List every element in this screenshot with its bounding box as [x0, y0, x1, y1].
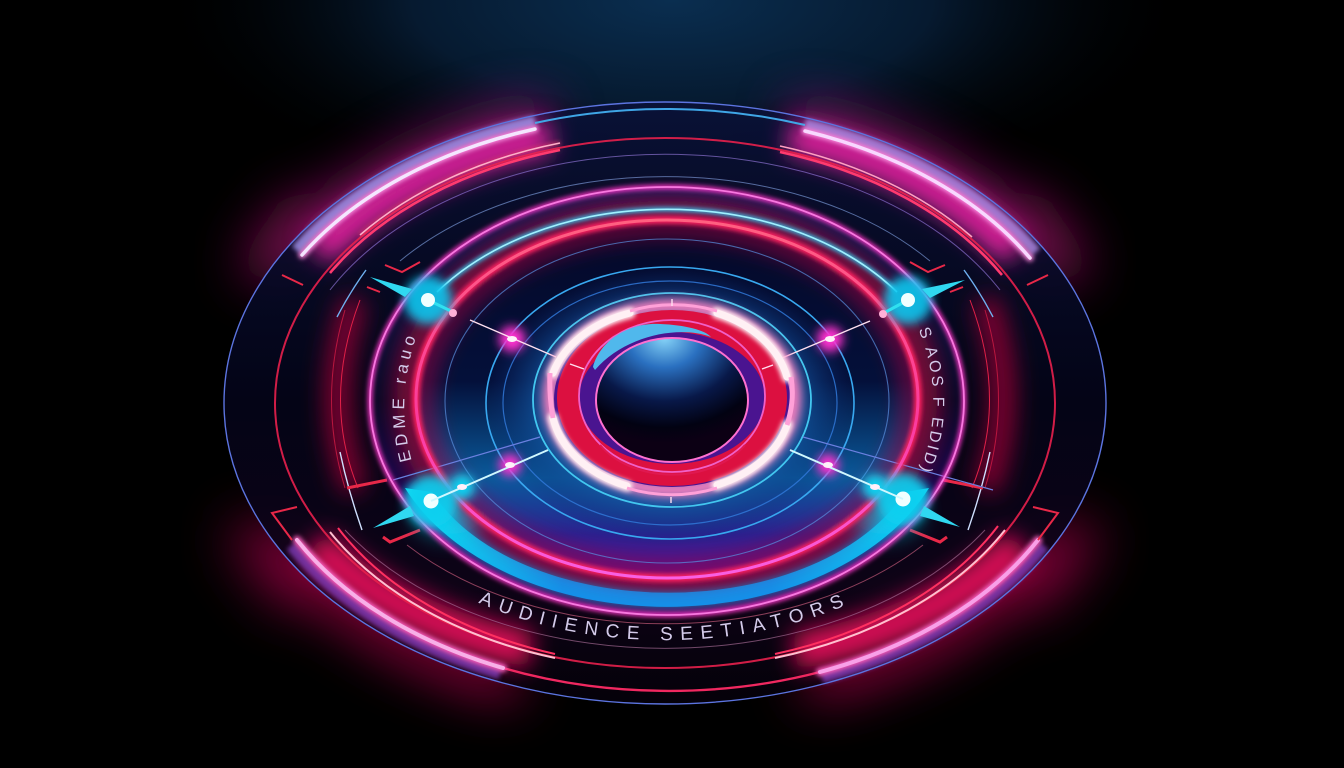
red corner brackets left [272, 262, 420, 542]
hub lower red arc [600, 445, 745, 475]
hub sphere [596, 338, 748, 462]
hub magenta ring [579, 320, 765, 472]
center blue halo [485, 265, 855, 545]
hub purple base [554, 311, 790, 487]
disc base [224, 102, 1106, 704]
cyan top arc [437, 209, 897, 292]
side red sectors [338, 300, 1002, 490]
thin outer rings [224, 102, 1106, 704]
hub cyan crescent [593, 324, 711, 370]
hub white segments [553, 313, 787, 486]
cyan node top left [370, 276, 457, 324]
top left bright arc [302, 129, 535, 255]
top right bright arc [805, 131, 1030, 258]
double red arcs [330, 143, 1005, 658]
blue crescent band [405, 488, 929, 607]
radial divider lines [393, 437, 993, 490]
cyan node bottom right [862, 473, 960, 527]
bottom right bright arc [820, 540, 1038, 672]
outer magenta bloom [250, 122, 1080, 680]
cyan node top right [879, 276, 965, 324]
right label: S AOS F EDID) [918, 328, 944, 472]
panel: outer glowing band [291, 121, 1044, 678]
hub red band [568, 321, 776, 475]
center hub [550, 299, 794, 503]
pink ring [370, 187, 964, 615]
spoke lines with pink nodes [431, 320, 903, 501]
red ring inner glow [421, 225, 913, 573]
inner disc [416, 220, 918, 578]
cyan node bottom left [373, 474, 475, 528]
bottom label: AUDIIENCE SEETIATORS [478, 592, 843, 640]
left label: EDME rauo [392, 336, 415, 462]
bottom left bright arc [297, 540, 503, 668]
rings: mid disc fill [370, 187, 964, 615]
red corner brackets right [910, 262, 1058, 542]
hub tick marks [570, 299, 773, 503]
cyan glow near lower nodes [416, 490, 919, 534]
red ring outer glow [405, 209, 929, 589]
red main ring [416, 220, 918, 578]
hub glow [550, 306, 794, 490]
hub pink connectors [550, 305, 792, 495]
thin blue rings [445, 239, 889, 563]
hub sphere rim [596, 338, 748, 462]
